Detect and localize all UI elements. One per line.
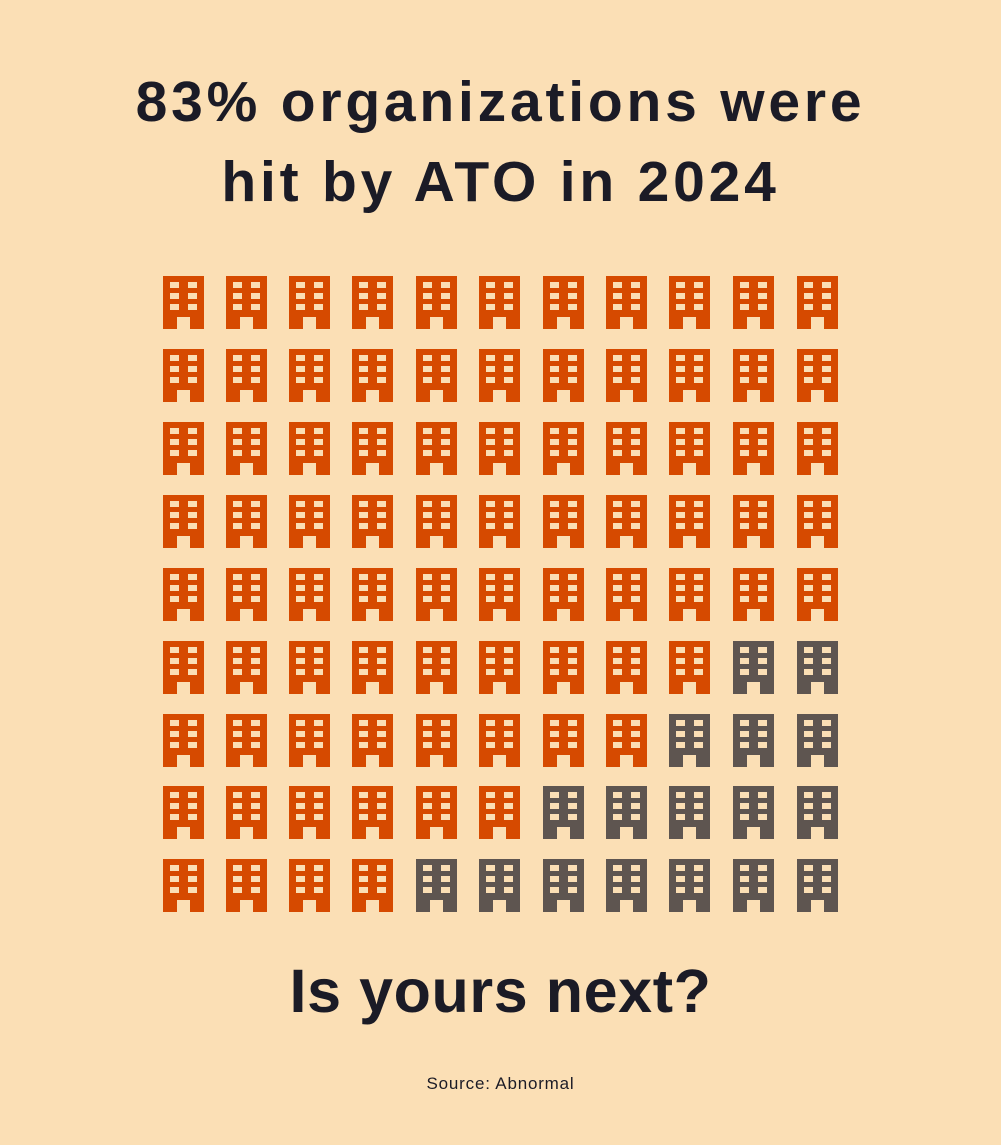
title [136,70,865,214]
title: hit by ATO in 2024 [221,150,780,214]
title: 83% organizations were [136,70,865,134]
source: Source: Abnormal [427,1074,574,1093]
question: Is yours next? [290,957,711,1025]
